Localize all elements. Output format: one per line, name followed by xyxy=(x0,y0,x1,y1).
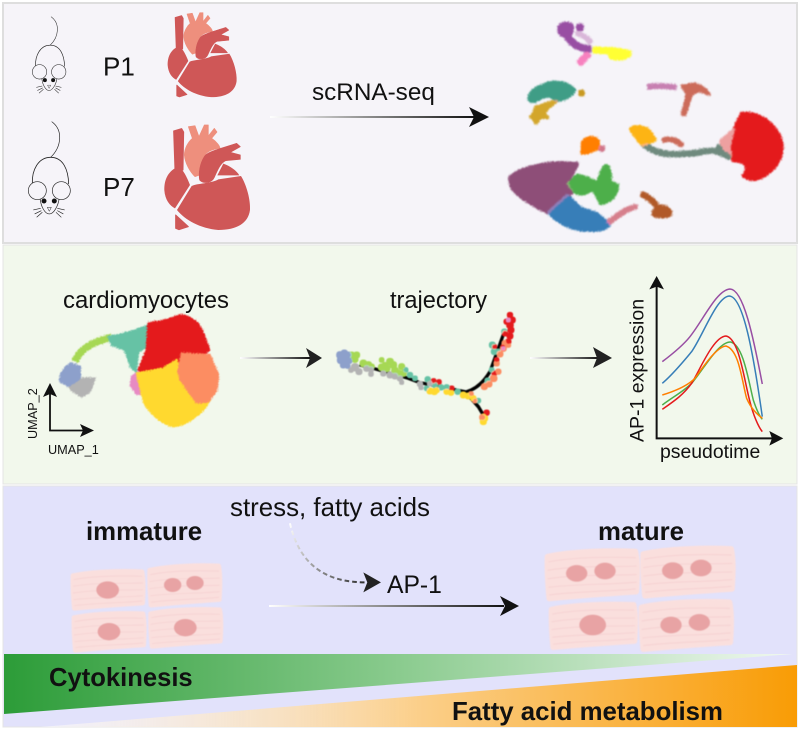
arrow: dashed to AP-1 xyxy=(290,523,381,592)
label: immature: immature xyxy=(86,518,202,546)
icon: mouse P7 xyxy=(28,122,70,217)
arrow: to trajectory xyxy=(240,348,322,368)
wedge: cytokinesis xyxy=(4,654,793,714)
panel: cardiomyocyte trajectory xyxy=(3,245,797,484)
label: trajectory: trajectory xyxy=(390,288,487,314)
label: UMAP_2: UMAP_2 xyxy=(26,388,40,439)
arrow: to expression plot xyxy=(530,347,612,368)
icon: mature cells xyxy=(548,549,733,649)
label: Cytokinesis: Cytokinesis xyxy=(49,664,193,692)
label: mature: mature xyxy=(598,518,684,546)
icon: mouse P1 xyxy=(32,17,66,93)
icon: heart P1 xyxy=(168,13,237,97)
x label: pseudotime xyxy=(660,441,760,463)
panel: scRNA-seq of mouse hearts xyxy=(3,3,797,243)
arrow: scRNA-seq xyxy=(270,107,489,127)
label: stress, fatty acids: stress, fatty acids xyxy=(230,494,430,522)
icon: heart P7 xyxy=(164,125,250,230)
label: scRNA-seq: scRNA-seq xyxy=(312,79,435,106)
chart: AP-1 expression over pseudotime xyxy=(626,276,783,463)
label: Fatty acid metabolism: Fatty acid metabolism xyxy=(452,698,723,726)
label: UMAP_1: UMAP_1 xyxy=(48,443,99,457)
label: P1: P1 xyxy=(103,52,135,82)
icon: immature cells xyxy=(73,566,221,650)
panel: maturation xyxy=(3,486,797,727)
label: cardiomyocytes: cardiomyocytes xyxy=(63,287,229,314)
label: AP-1: AP-1 xyxy=(387,572,442,599)
arrow: immature to mature xyxy=(269,596,519,616)
chart: UMAP of all cells xyxy=(509,23,783,231)
axes xyxy=(649,276,783,446)
curves xyxy=(662,289,762,432)
chart: trajectory xyxy=(337,312,515,425)
y label: AP-1 expression xyxy=(626,299,648,442)
icon: UMAP axes xyxy=(43,383,94,437)
label: P7: P7 xyxy=(103,172,135,202)
wedge: fatty acid metabolism xyxy=(40,665,797,727)
chart: cardiomyocyte UMAP xyxy=(60,315,218,427)
